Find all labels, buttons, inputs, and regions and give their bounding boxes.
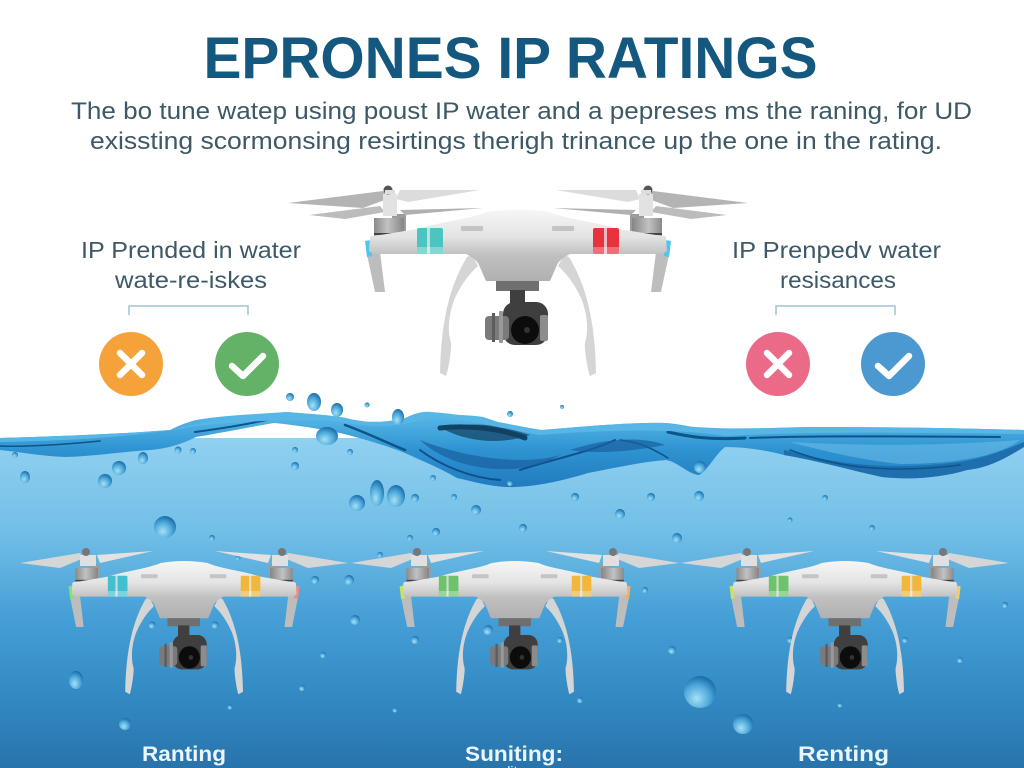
icon: green check [215,332,279,396]
subtitle text block: exissting scormonsing resirtings therigh trinance up the one in the rating. [90,128,942,155]
dark water streaks [0,418,1000,480]
subtitle text block: The bo tune watep using poust IP water and a pepreses ms the raning, for UD [71,98,972,125]
subtitle text block [71,98,972,155]
icon: blue check [861,332,925,396]
left label text: IP Prended in water [81,237,301,263]
water surface splash [0,412,1024,487]
left label text [81,237,301,293]
underwater drone right [681,548,1009,694]
right label text: IP Prenpedv water [732,237,941,263]
main drone [288,186,748,376]
rating labels: Suniting: [465,743,563,766]
panel: water [0,412,1024,768]
right label text: resisances [780,267,896,293]
title: EPRONES IP RATINGS [204,26,818,91]
underwater drone left [20,548,348,694]
rating labels: Renting [798,743,889,766]
underwater drone centre [351,548,679,694]
water droplets [12,393,1008,734]
right label text [732,237,941,293]
icon: pink cross [746,332,810,396]
rating labels [142,743,889,768]
icon: orange cross [99,332,163,396]
left label text: wate-re-iskes [114,267,267,293]
rating labels: Ranting [142,743,226,766]
